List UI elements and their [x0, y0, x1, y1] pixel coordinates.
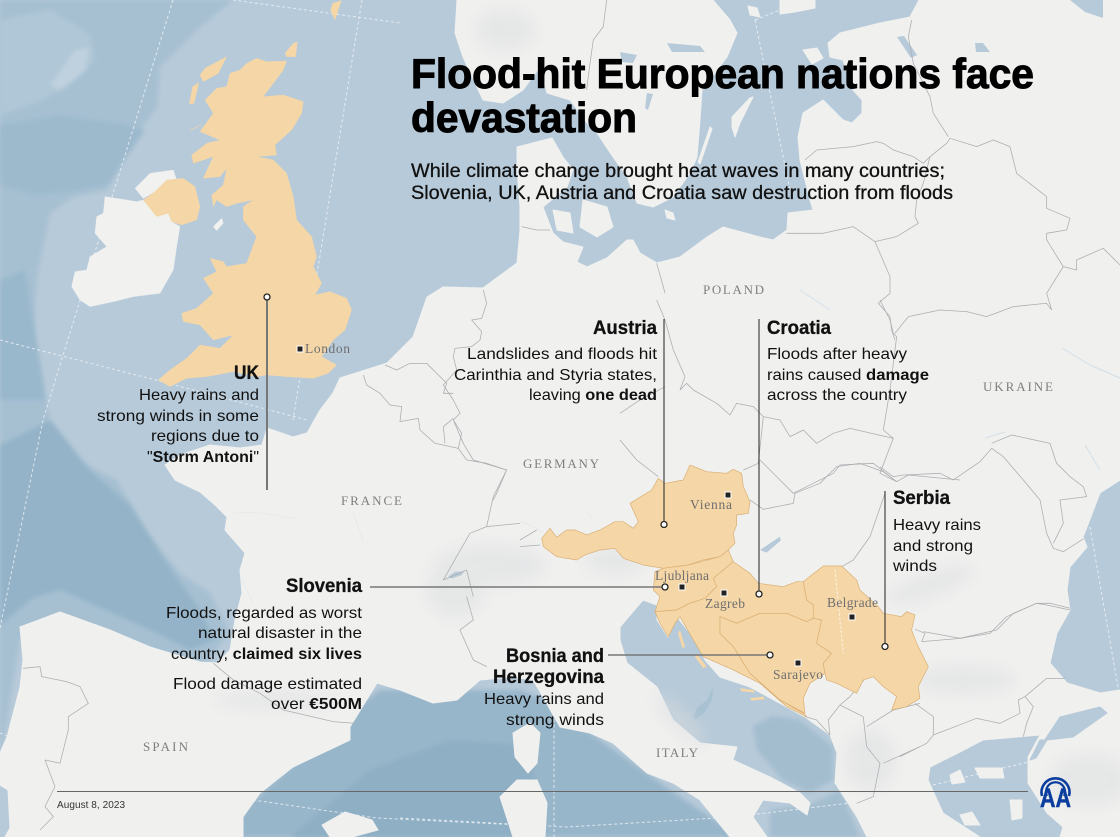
callout: Austria — [454, 318, 658, 404]
callout: Bosnia and Herzegovina: Herzegovina — [493, 667, 604, 688]
map: lakes and rivers — [233, 0, 1120, 605]
date: August 8, 2023 — [57, 800, 125, 811]
callout: Bosnia and Herzegovina: Bosnia and — [506, 646, 604, 667]
city: Ljubljana: Ljubljana — [655, 568, 709, 583]
label: FRANCE: FRANCE — [341, 493, 402, 508]
country: Croatia — [655, 562, 813, 717]
city: Vienna: Vienna — [690, 497, 732, 512]
callout: Slovenia: over €500M — [271, 696, 362, 713]
callout: UK: regions due to — [151, 428, 259, 445]
callout: Slovenia: natural disaster in the — [198, 625, 362, 642]
country: Bosnia and Herzegovina — [720, 613, 832, 713]
callout: Serbia: and strong — [893, 538, 973, 555]
callout: Croatia: Croatia — [767, 318, 831, 339]
callout: Bosnia and Herzegovina — [484, 646, 604, 729]
callout: Austria: leaving one dead — [529, 387, 657, 404]
city: Ljubljana — [655, 568, 709, 590]
leader line: Croatia — [756, 319, 762, 597]
callout: Serbia: Heavy rains — [893, 517, 981, 534]
callout: Austria: Carinthia and Styria states, — [454, 367, 657, 384]
label: GERMANY: GERMANY — [523, 456, 600, 471]
callout: Croatia: Floods after heavy — [767, 346, 907, 363]
callout: UK — [97, 363, 259, 466]
title: devastation — [411, 94, 637, 141]
leader line: Slovenia — [370, 584, 668, 590]
footer rule — [57, 790, 1028, 792]
callout: Croatia: rains caused damage — [767, 367, 929, 384]
leader line: Bosnia and Herzegovina — [608, 652, 773, 658]
subtitle: While climate change brought heat waves in many countries; — [411, 161, 945, 182]
leader line: Serbia — [882, 491, 888, 650]
city: Belgrade — [827, 595, 878, 620]
callout: Slovenia: Flood damage estimated — [173, 676, 362, 693]
callout: UK: UK — [234, 363, 259, 384]
title: Flood-hit European nations face — [411, 50, 1034, 97]
callout: Croatia — [767, 318, 929, 404]
leader line: UK — [264, 294, 270, 490]
callout: Croatia: across the country — [767, 387, 907, 404]
city: Zagreb: Zagreb — [705, 596, 745, 611]
callout: Serbia: Serbia — [893, 488, 950, 509]
highlighted country: United Kingdom — [143, 1, 352, 387]
subtitle: Slovenia, UK, Austria and Croatia saw destruction from floods — [411, 183, 953, 204]
Croatian islands — [678, 630, 765, 701]
title — [411, 50, 1034, 141]
callout: Bosnia and Herzegovina: Heavy rains and — [484, 691, 604, 708]
callout: Austria: Austria — [593, 318, 657, 339]
country: Slovenia — [653, 550, 733, 612]
leader line: Austria — [661, 319, 667, 528]
subtitle — [411, 161, 953, 204]
map: mountain shading — [215, 10, 1120, 805]
callout: Slovenia: country, claimed six lives — [171, 646, 362, 663]
callout: UK: Heavy rains and — [139, 387, 259, 404]
city: Sarajevo — [773, 660, 823, 682]
callout: UK: strong winds in some — [97, 408, 259, 425]
label: ITALY: ITALY — [656, 745, 699, 760]
callout: Slovenia — [166, 576, 363, 713]
map: Ireland — [72, 170, 223, 307]
callout: Bosnia and Herzegovina: strong winds — [506, 712, 604, 729]
logo: Anadolu Agency: AA — [1040, 783, 1071, 813]
callout: Serbia: winds — [892, 558, 937, 575]
city: Sarajevo: Sarajevo — [773, 667, 823, 682]
callout: UK: "Storm Antoni" — [147, 449, 259, 466]
callout: Austria: Landslides and floods hit — [467, 346, 658, 363]
callout: Slovenia: Slovenia — [286, 576, 362, 597]
country: Serbia — [803, 566, 928, 710]
callout: Slovenia: Floods, regarded as worst — [166, 605, 363, 622]
label: SPAIN: SPAIN — [143, 739, 189, 754]
label: UKRAINE: UKRAINE — [983, 379, 1053, 394]
country: Austria — [542, 465, 750, 568]
highlighted countries: Austria, Slovenia, Croatia, Bosnia, Serbia — [542, 465, 928, 717]
label: POLAND: POLAND — [703, 282, 764, 297]
callout: Serbia — [892, 488, 981, 575]
city: Belgrade: Belgrade — [827, 595, 878, 610]
city: London: London — [305, 341, 350, 356]
